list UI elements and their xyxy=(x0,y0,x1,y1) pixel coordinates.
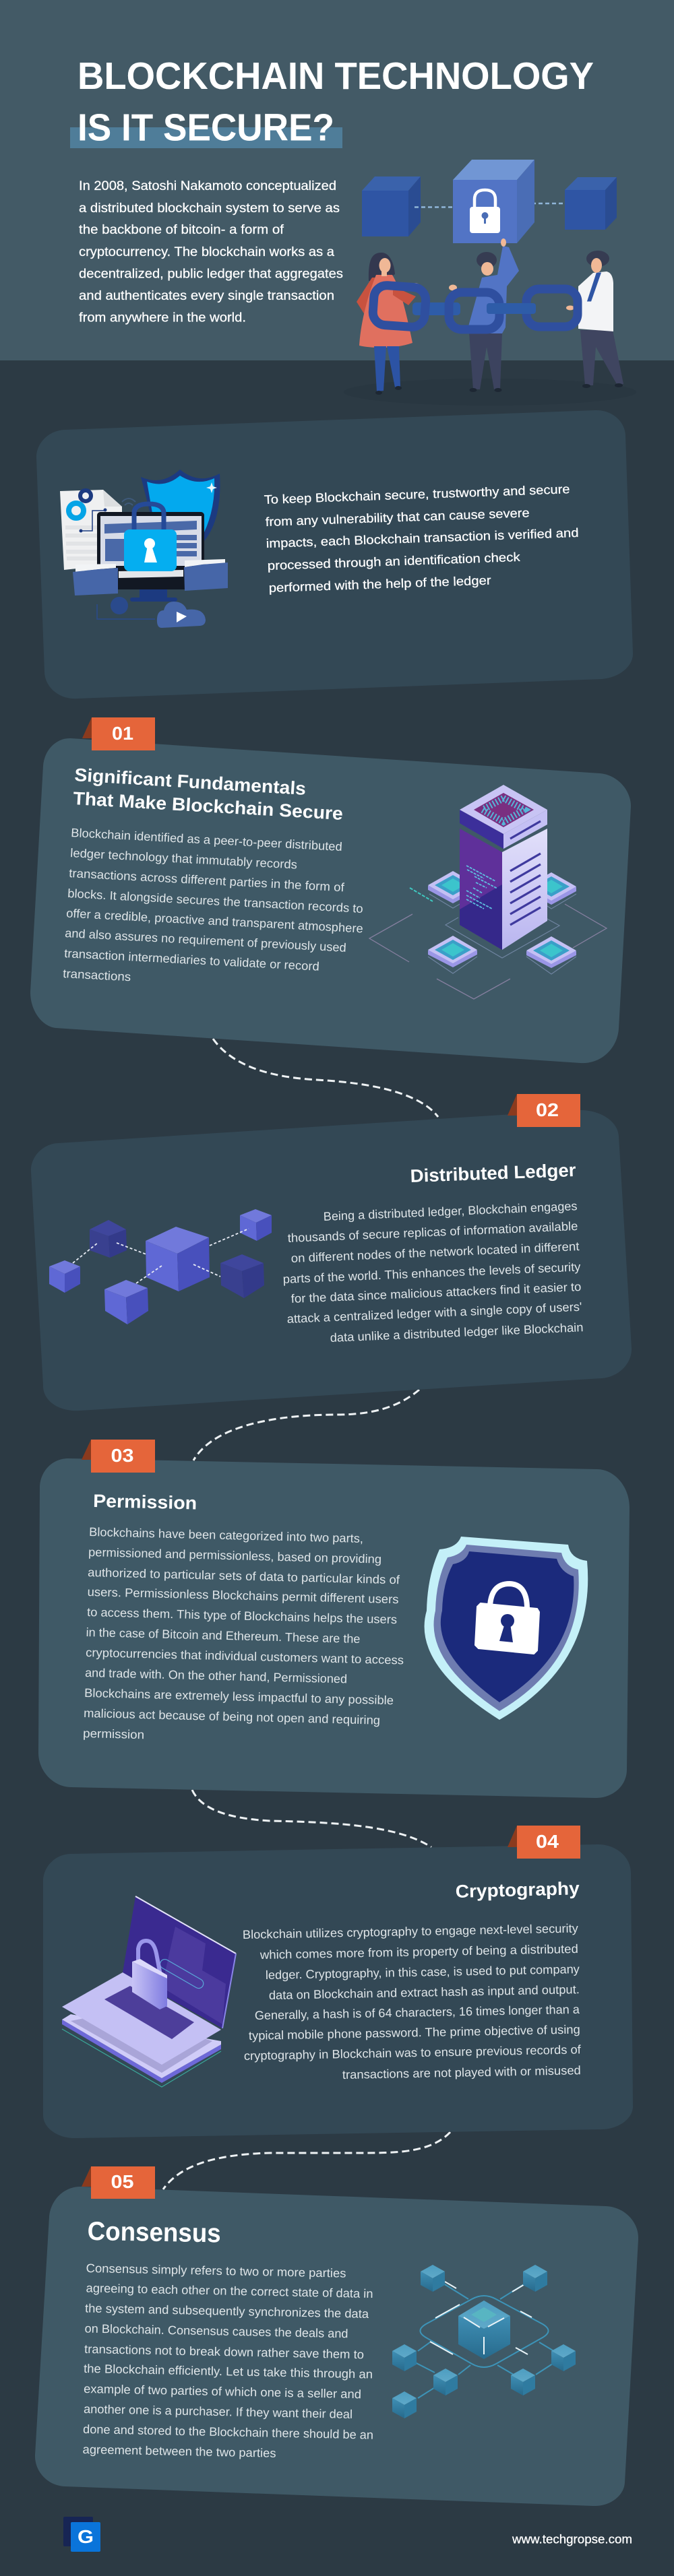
body text 02: parts of the world. This enhances the levels of security xyxy=(282,1260,581,1286)
panel: intro security card xyxy=(36,410,633,699)
body text 05: the system and subsequently synchronizes the data xyxy=(85,2302,369,2321)
body text 05: agreeing to each other on the correct state of data in xyxy=(86,2282,373,2300)
chip front right xyxy=(526,936,576,968)
intro text: cryptocurrency. The blockchain works as a xyxy=(79,245,334,259)
body text 05 xyxy=(82,2261,373,2460)
body text 04: transactions are not played with or misused xyxy=(342,2063,581,2082)
dashed connector: 03 to 04 xyxy=(192,1790,431,1847)
dashed connector: 04 to 05 xyxy=(163,2132,450,2189)
heading 01 xyxy=(73,765,344,824)
body text 04: ledger. Cryptography, in this case, is used to put company xyxy=(266,1962,580,1982)
heading 02: Distributed Ledger xyxy=(410,1160,577,1186)
body text 02 xyxy=(282,1199,584,1345)
badge 05: 05 xyxy=(111,2171,133,2192)
intro text: and authenticates every single transaction xyxy=(79,289,334,303)
icon: isometric server with chips xyxy=(369,785,607,999)
badge 05 xyxy=(82,2166,155,2199)
badge 01: 01 xyxy=(112,723,133,744)
body text 03: permission xyxy=(83,1727,144,1741)
intro text: the backbone of bitcoin- a form of xyxy=(79,223,284,237)
person: woman xyxy=(357,253,419,395)
body text 05: Consensus simply refers to two or more parties xyxy=(86,2261,346,2280)
body text 01 xyxy=(63,826,363,984)
body text 03: and trade with. On the other hand, Permissioned xyxy=(85,1666,347,1686)
body text 04: data on Blockchain and extract hash as input and output. xyxy=(269,1983,580,2002)
badge 04: 04 xyxy=(536,1831,559,1852)
badge 03: 03 xyxy=(111,1445,133,1466)
intro text: from anywhere in the world. xyxy=(79,311,246,325)
body text 03: Blockchains are extremely less impactful to any possible xyxy=(84,1686,394,1707)
intro card text xyxy=(264,482,579,595)
icon: security illustration xyxy=(60,470,228,628)
dashed connector: 01 to 02 xyxy=(213,1039,438,1117)
icon: left block xyxy=(362,176,421,236)
title: BLOCKCHAIN TECHNOLOGY xyxy=(78,55,594,98)
illustration: people holding a chain under locked blocks xyxy=(344,160,636,406)
body text 01: and also assures no requirement of previously used xyxy=(65,926,346,955)
intro text: a distributed blockchain system to serve as xyxy=(79,201,340,216)
badge 04 xyxy=(508,1826,580,1859)
icon: chain links xyxy=(372,284,578,329)
intro text xyxy=(79,179,343,325)
body text 03: users. Permissionless Blockchains permit different users xyxy=(87,1585,399,1606)
body text 03: to access them. This type of Blockchains helps the users xyxy=(87,1605,397,1626)
body text 05: agreement between the two parties xyxy=(82,2443,276,2460)
badge 01 xyxy=(82,717,155,750)
body text 03: authorized to particular sets of data to particular kinds of xyxy=(88,1566,400,1586)
website url: www.techgropse.com xyxy=(512,2533,632,2546)
server tower xyxy=(460,785,547,950)
title: IS IT SECURE? xyxy=(78,106,334,150)
icon: laptop with padlock xyxy=(62,1896,236,2087)
heading 05: Consensus xyxy=(87,2217,221,2248)
body text 01: blocks. It alongside secures the transaction records to xyxy=(67,887,363,915)
body text 02: Being a distributed ledger, Blockchain engages xyxy=(323,1199,578,1223)
icon: block network xyxy=(392,2265,576,2418)
icon: shield with padlock xyxy=(425,1537,588,1720)
body text 03: cryptocurrencies that individual customers want to access xyxy=(86,1646,404,1667)
body text 01: transaction intermediaries to validate or record xyxy=(64,946,319,973)
body text 01: transactions xyxy=(63,967,131,984)
body text 04: Generally, a hash is of 64 characters, 16 times longer than a xyxy=(255,2003,580,2022)
intro text: In 2008, Satoshi Nakamoto conceptualized xyxy=(79,179,336,193)
intro card text: processed through an identification check xyxy=(267,550,521,573)
body text 01: ledger technology that immutably records xyxy=(70,846,297,872)
body text 05: on Blockchain. Consensus causes the deals and xyxy=(84,2322,348,2340)
chip back left xyxy=(428,871,478,903)
body text 05: done and stored to the Blockchain there should be an xyxy=(83,2422,373,2442)
body text 01: offer a credible, proactive and transparent atmosphere xyxy=(66,907,363,936)
heading 04: Cryptography xyxy=(455,1878,580,1902)
dashed connector: 02 to 03 xyxy=(193,1390,419,1460)
body text 05: transactions not to break down rather save them to xyxy=(84,2342,364,2361)
badge 02 xyxy=(508,1094,580,1127)
intro card text: from any vulnerability that can cause severe xyxy=(265,505,530,529)
body text 05: example of two parties of which one is a seller and xyxy=(84,2382,361,2401)
chip front left xyxy=(428,936,477,967)
body text 04: typical mobile phone password. The prime objective of using xyxy=(249,2023,580,2042)
body text 02: thousands of secure replicas of information available xyxy=(287,1219,578,1245)
body text 01: Blockchain identified as a peer-to-peer distributed xyxy=(71,826,342,854)
body text 03: Blockchains have been categorized into two parts, xyxy=(89,1525,363,1545)
panel: 02 distributed ledger xyxy=(31,1094,632,1411)
panel: 03 permission xyxy=(38,1440,630,1798)
badge 02: 02 xyxy=(536,1099,559,1120)
chip back right xyxy=(526,872,576,905)
person: right man xyxy=(566,251,623,388)
body text 03: in the case of Bitcoin and Ethereum. These are the xyxy=(86,1625,361,1646)
body text 01: transactions across different parties in the form of xyxy=(69,866,345,894)
badge 03 xyxy=(82,1440,155,1473)
panel: 01 significant fundamentals xyxy=(30,717,631,1063)
logo: G xyxy=(78,2526,94,2547)
title xyxy=(70,55,594,150)
logo xyxy=(63,2517,100,2552)
body text 05: another one is a purchaser. If they want their deal xyxy=(84,2402,353,2421)
panel: 05 consensus xyxy=(35,2166,638,2506)
heading 01: That Make Blockchain Secure xyxy=(73,788,344,824)
icon: central padlock block xyxy=(453,160,534,243)
dotted block links xyxy=(415,203,565,207)
intro text: decentralized, public ledger that aggregates xyxy=(79,267,343,282)
intro card text: impacts, each Blockchain transaction is verified and xyxy=(266,525,579,550)
body text 04 xyxy=(243,1921,582,2082)
intro card text: performed with the help of the ledger xyxy=(268,573,491,595)
body text 03 xyxy=(83,1525,404,1741)
body text 02: for the data since malicious attackers find it easier to xyxy=(290,1280,582,1306)
intro card text: To keep Blockchain secure, trustworthy and secure xyxy=(264,482,570,507)
icon: right block xyxy=(565,177,617,230)
heading 01: Significant Fundamentals xyxy=(74,765,307,799)
body text 04: which comes more from its property of being a distributed xyxy=(259,1942,578,1962)
panel: 04 cryptography xyxy=(43,1826,633,2138)
body text 03: permissioned and permissionless, based on providing xyxy=(88,1545,381,1566)
body text 03: malicious act because of being not open and requiring xyxy=(84,1706,380,1727)
hero background xyxy=(0,0,674,360)
body text 02: on different nodes of the network located in different xyxy=(290,1239,580,1265)
body text 02: attack a centralized ledger with a single copy of users' xyxy=(286,1300,582,1326)
body text 04: cryptography in Blockchain was to ensure previous records of xyxy=(244,2042,582,2063)
heading 03: Permission xyxy=(93,1491,197,1513)
body text 04: Blockchain utilizes cryptography to engage next-level security xyxy=(243,1921,578,1941)
person: middle man xyxy=(449,238,519,392)
body text 02: data unlike a distributed ledger like Blockchain xyxy=(330,1320,584,1345)
body text 05: the Blockchain efficiently. Let us take this through an xyxy=(84,2362,373,2381)
icon: connected isometric cubes xyxy=(49,1209,272,1324)
